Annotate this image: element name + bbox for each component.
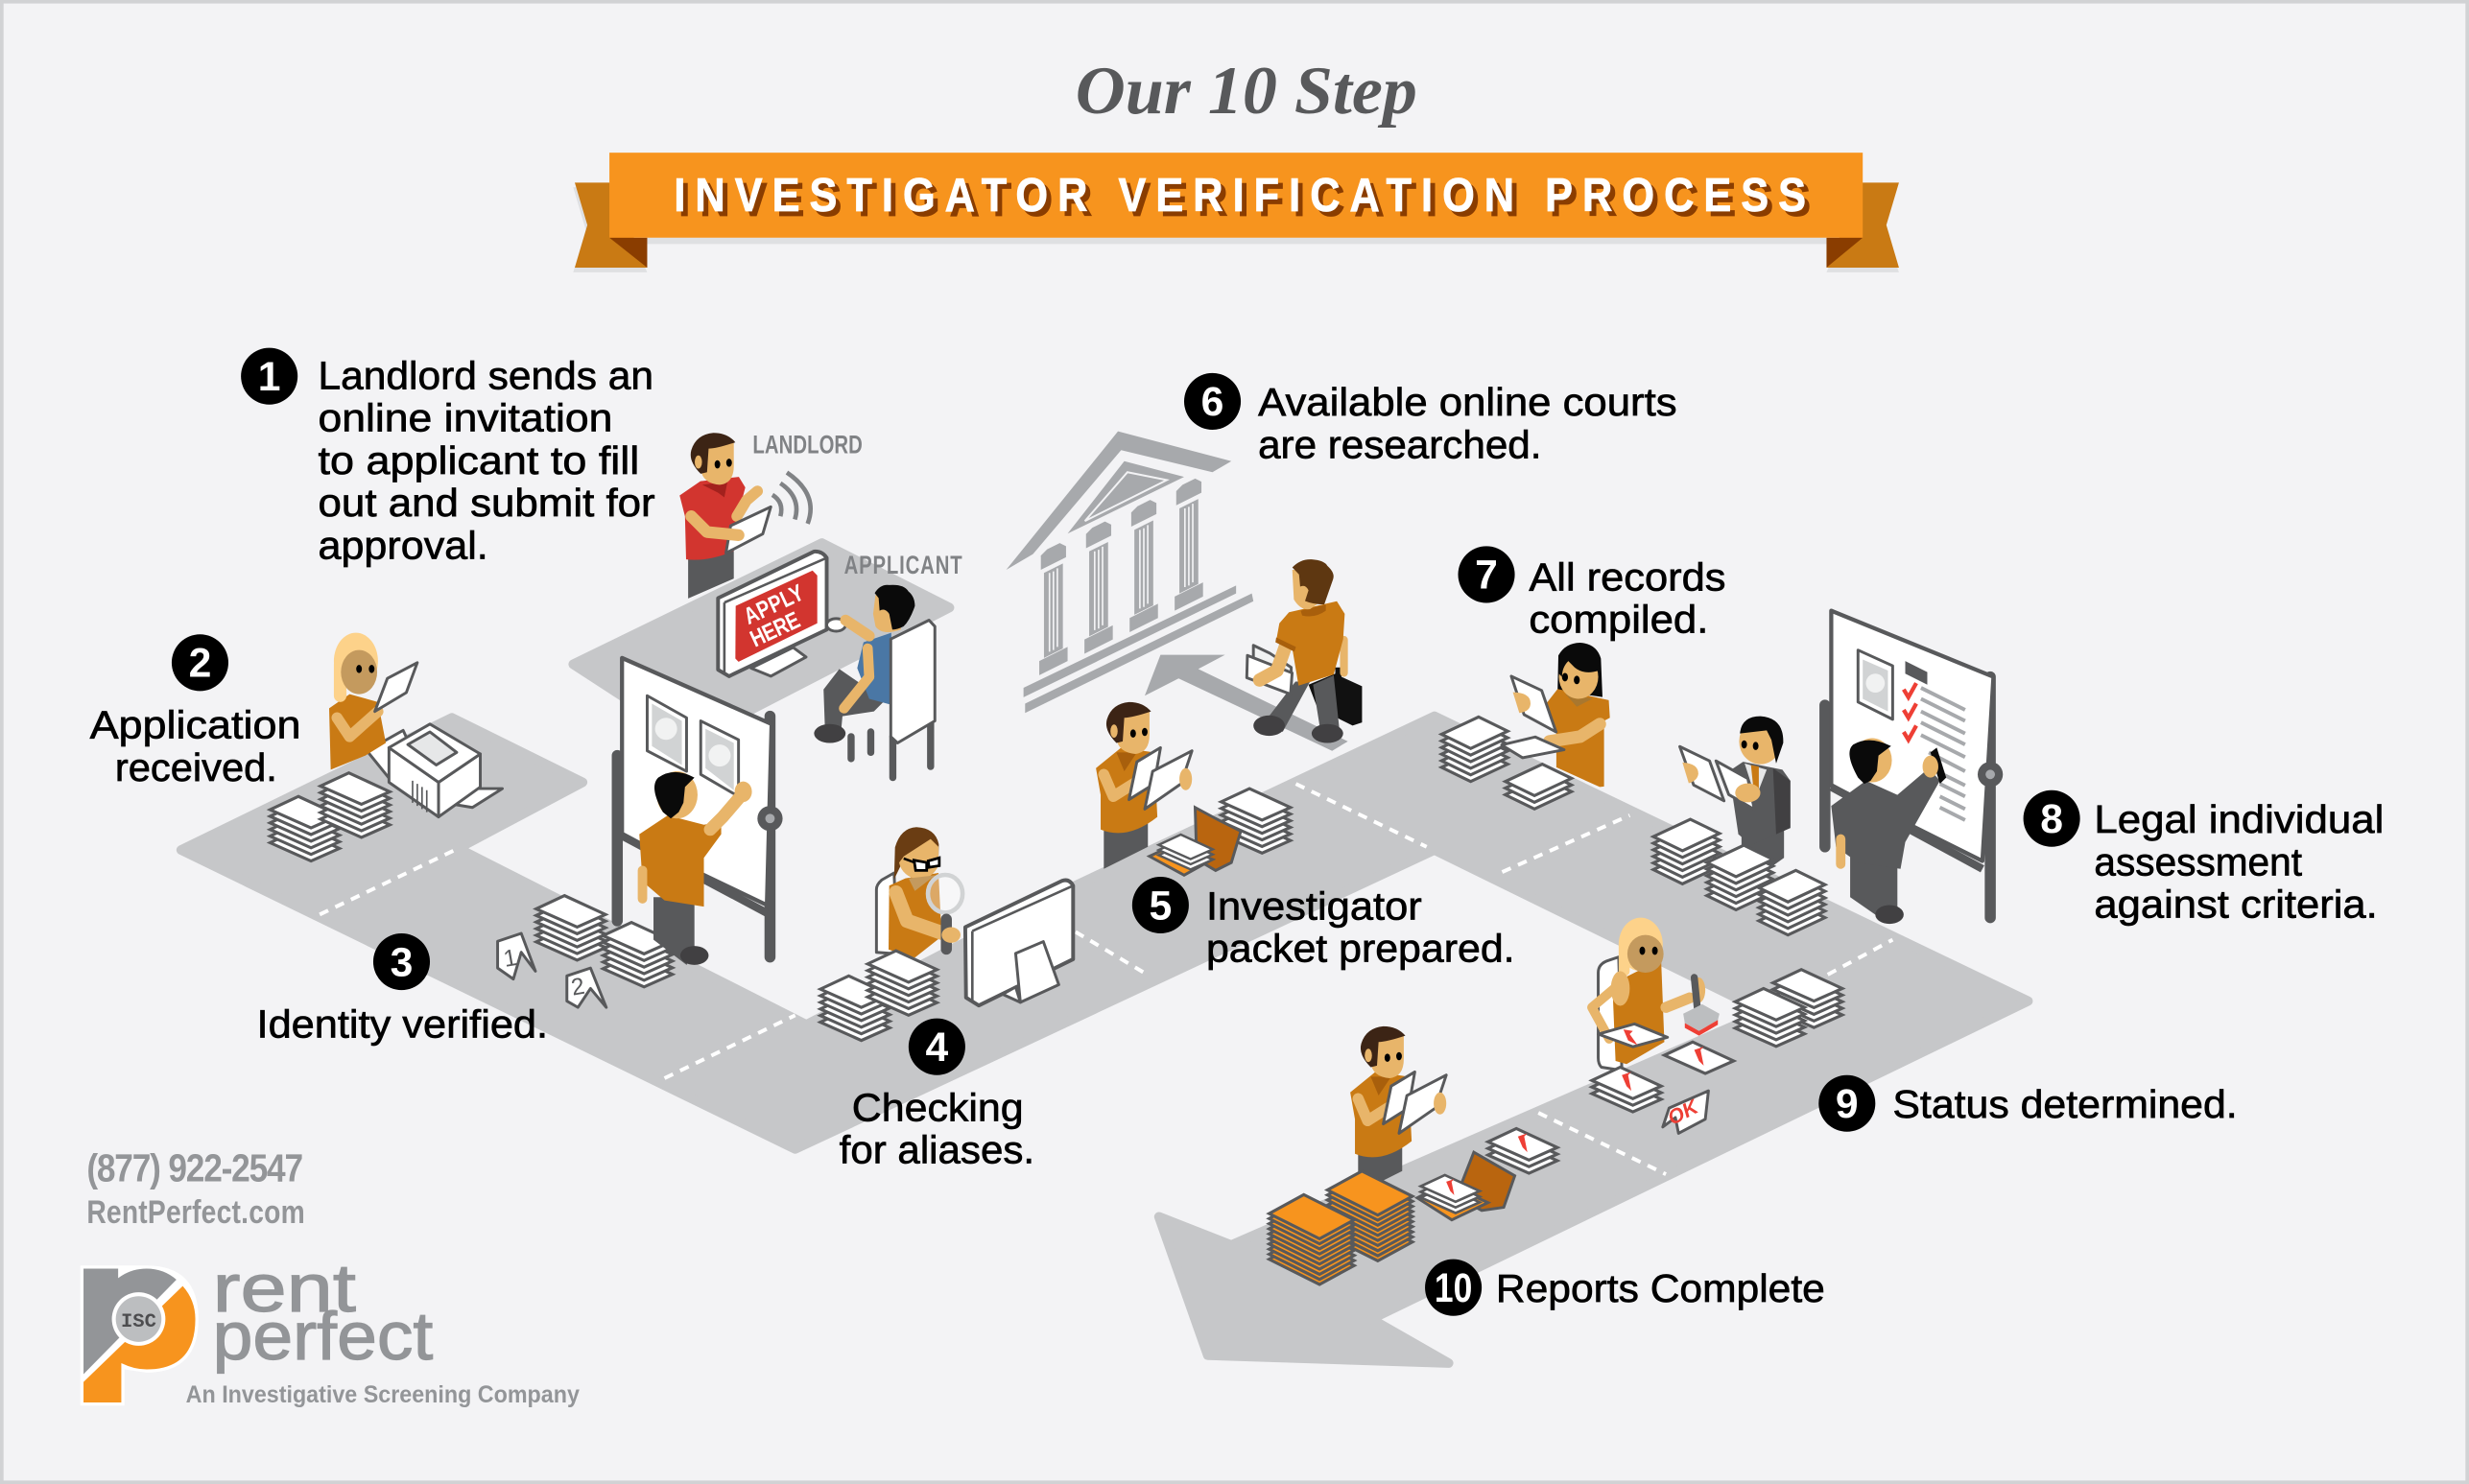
step 1 number and text: out and submit for <box>319 481 655 525</box>
step 1 applicant in chair <box>814 585 935 778</box>
step 8 number and text: 8 <box>2040 796 2063 842</box>
step 5 person with papers and folder <box>1096 702 1241 875</box>
step 5 number and text: Investigator <box>1206 883 1422 928</box>
step 7 number and text: All records <box>1529 554 1725 599</box>
title: Our 10 Step: Our 10 Step <box>1076 54 1417 129</box>
contact phone: (877) 922-2547 <box>86 1146 303 1190</box>
step 4 number and text: 4 <box>926 1025 949 1071</box>
step 7 number and text: compiled. <box>1529 598 1708 642</box>
step 9 number and text <box>1818 1075 2238 1132</box>
court building icon <box>1007 432 1253 713</box>
step 1 platform applicant monitor: APPLY <box>740 579 808 629</box>
contact website: RentPerfect.com <box>86 1192 305 1231</box>
arrow toward court <box>1145 655 1348 751</box>
step 5 number and text: 5 <box>1150 883 1172 929</box>
step 2 printer <box>367 724 503 817</box>
step 3 evidence markers: 2 <box>569 974 586 1001</box>
step 3 number and text: Identity verified. <box>257 1001 548 1046</box>
step 3 stack near person <box>604 923 673 987</box>
step 9 stacks <box>1735 970 1842 1047</box>
step 8 number and text: assessment <box>2094 839 2303 883</box>
step 2 number and text: received. <box>115 745 277 789</box>
step 3 evidence markers <box>498 933 606 1007</box>
step 4 number and text: Checking <box>852 1085 1024 1129</box>
step 3 evidence board <box>617 658 783 957</box>
step 1 number and text <box>241 348 655 568</box>
step 6 number and text <box>1184 373 1677 466</box>
step 1 number and text: approval. <box>319 524 488 568</box>
step 10 person with report <box>1350 1026 1446 1193</box>
step 5 number and text <box>1132 877 1515 971</box>
step 2 woman with paper <box>329 633 417 769</box>
step 4 number and text: for aliases. <box>840 1128 1034 1172</box>
step 4 number and text <box>840 1019 1034 1172</box>
process path floor <box>181 543 2028 1363</box>
logo wordmark: perfect <box>213 1298 434 1374</box>
OK sign <box>1663 1091 1708 1133</box>
step 2 number and text: 2 <box>189 641 211 687</box>
step divider dashes <box>320 784 1892 1174</box>
banner ribbon <box>573 153 1899 272</box>
step 8 number and text <box>2024 790 2384 927</box>
logo wordmark: rent <box>213 1250 356 1326</box>
paper stacks <box>270 717 1508 960</box>
step 7 small stack <box>1506 765 1572 809</box>
label: landlord: LANDLORD <box>752 431 863 459</box>
step 3 number and text: 3 <box>391 939 413 985</box>
step 8 stacks <box>1653 819 1825 935</box>
step 8 number and text: against criteria. <box>2094 883 2378 927</box>
step 8 suited investigator with papers <box>1680 717 1791 882</box>
step 1 number and text: to applicant to fill <box>319 438 639 483</box>
step 6 number and text: Available online courts <box>1258 380 1677 424</box>
step 10 number and text <box>1425 1260 1825 1316</box>
step 2 number and text <box>90 634 300 789</box>
step 1 number and text: Landlord sends an <box>319 353 653 397</box>
step 7 number and text <box>1459 546 1725 642</box>
step 6 number and text: are researched. <box>1258 422 1541 466</box>
step 7 woman with records <box>1502 643 1610 787</box>
step 1 platform applicant monitor <box>718 552 827 676</box>
banner ribbon: INVESTIGATOR VERIFICATION PROCESS <box>674 168 1806 221</box>
step 1 platform applicant monitor: HERE <box>746 606 804 652</box>
step 3 person at board <box>638 771 752 965</box>
step 5 number and text: packet prepared. <box>1206 927 1515 971</box>
logo tagline: An Investigative Screening Company <box>186 1381 580 1408</box>
label: applicant: APPLICANT <box>844 551 962 580</box>
OK sign: OK <box>1664 1095 1703 1130</box>
step 6 number and text: 6 <box>1201 379 1223 425</box>
step 7 number and text: 7 <box>1475 553 1498 599</box>
step 10 number and text: Reports Complete <box>1496 1266 1825 1310</box>
step 10 number and text: 10 <box>1435 1265 1472 1311</box>
step 1 landlord figure <box>679 433 771 599</box>
step 8 number and text: Legal individual <box>2094 797 2384 841</box>
step 1 number and text: 1 <box>258 354 281 400</box>
logo mark: ISC <box>121 1311 156 1333</box>
step 9 number and text: Status determined. <box>1892 1082 2238 1126</box>
step 9 number and text: 9 <box>1836 1081 1859 1127</box>
step 4 woman with magnifier and monitor <box>820 827 1073 1041</box>
step 9 woman stamping <box>1592 918 1734 1112</box>
step 10 folder and reports <box>1270 1128 1557 1284</box>
step 6 person walking with briefcase <box>1246 559 1362 742</box>
step 3 evidence markers: 1 <box>502 945 519 973</box>
logo wordmark <box>213 1250 434 1374</box>
logo mark <box>81 1265 199 1405</box>
icon: wifi signal <box>772 473 811 524</box>
step 8 board with checklist <box>1825 611 2003 918</box>
step 3 number and text <box>257 933 548 1046</box>
banner ribbon: INVESTIGATOR VERIFICATION PROCESS <box>678 173 1811 225</box>
step 8 suited man writing on board <box>1831 739 1946 924</box>
step 1 number and text: online invitation <box>319 396 612 440</box>
step 2 number and text: Application <box>90 703 300 747</box>
